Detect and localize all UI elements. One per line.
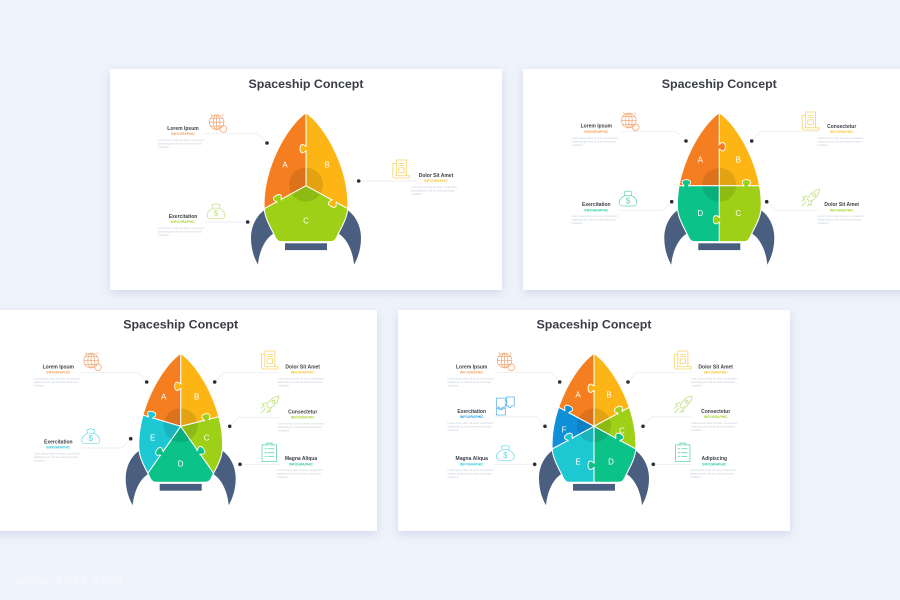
callout: Lorem Ipsum: [448, 353, 562, 387]
callout: Consectetur: Lorem ipsum dolor sit amet, consectetur: [278, 422, 324, 426]
callout: Lorem Ipsum: adipiscing elit, sed do eiusmod tempor: [158, 141, 202, 145]
callout: Dolor Sit Amet: [357, 160, 457, 196]
callout: Consectetur: Consectetur: [701, 409, 730, 415]
callout: Lorem Ipsum: incididunt: [448, 383, 459, 387]
callout: Exercitation: adipiscing elit, sed do eiusmod tempor: [448, 424, 492, 428]
callout: Dolor Sit Amet: Lorem ipsum dolor sit amet, consectetur: [818, 214, 864, 218]
callout: Consectetur: INFOGRAPHIC: [830, 130, 854, 134]
title: Spaceship Concept: [662, 77, 777, 91]
callout: Magna Aliqua: Magna Aliqua: [456, 456, 488, 462]
rocket: parts A B C D E F: F: [562, 425, 567, 434]
callout: Exercitation: Exercitation: [582, 202, 611, 208]
rocket: parts A B C D E: B: [194, 392, 199, 401]
panel: three-part rocket: [110, 69, 502, 290]
callout: Consectetur: incididunt: [818, 143, 829, 147]
rocket: parts A B C D E: D: [178, 459, 184, 468]
callout: Consectetur: adipiscing elit, sed do eiusmod tempor: [278, 425, 322, 429]
callout: Consectetur: adipiscing elit, sed do eiusmod tempor: [691, 424, 735, 428]
rocket: parts A B C: [246, 111, 366, 265]
callout: Exercitation: INFOGRAPHIC: [46, 446, 71, 450]
title: Spaceship Concept: [249, 77, 363, 91]
callout: Magna Aliqua: incididunt: [448, 475, 459, 479]
callout: Exercitation: incididunt: [158, 233, 169, 237]
callout: Adipiscing: incididunt: [690, 475, 701, 479]
callout: Lorem Ipsum: adipiscing elit, sed do eiusmod tempor: [34, 380, 78, 384]
callout: Dolor Sit Amet: incididunt: [278, 383, 289, 387]
callout: Lorem Ipsum: adipiscing elit, sed do eiusmod tempor: [448, 380, 492, 384]
rocket: parts A B C D: B: [736, 156, 741, 165]
callout: Consectetur: Lorem ipsum dolor sit amet, consectetur: [818, 136, 864, 140]
callout: Dolor Sit Amet: INFOGRAPHIC: [830, 208, 854, 212]
callout: Exercitation: [572, 191, 674, 225]
callout: Lorem Ipsum: [158, 114, 269, 149]
callout: Lorem Ipsum: Lorem ipsum dolor sit amet, consectetur: [572, 136, 618, 140]
callout: Lorem Ipsum: INFOGRAPHIC: [46, 371, 71, 375]
callout: Dolor Sit Amet: adipiscing elit, sed do eiusmod tempor: [691, 380, 735, 384]
callout: Dolor Sit Amet: incididunt: [411, 192, 422, 196]
callout: Consectetur: INFOGRAPHIC: [291, 416, 315, 420]
callout: Exercitation: INFOGRAPHIC: [171, 220, 195, 224]
callout: Magna Aliqua: [448, 445, 536, 479]
rocket: parts A B C D E F: E: [575, 457, 581, 466]
callout: Lorem Ipsum: adipiscing elit, sed do eiusmod tempor: [572, 139, 616, 143]
callout: Consectetur: Consectetur: [288, 410, 317, 416]
callout: Exercitation: Lorem ipsum dolor sit amet, consectetur: [158, 226, 204, 230]
rocket: parts A B C D: C: [735, 209, 741, 218]
callout: Lorem Ipsum: Lorem ipsum dolor sit amet, consectetur: [158, 138, 204, 142]
callout: Exercitation: adipiscing elit, sed do eiusmod tempor: [34, 455, 78, 459]
callout: Dolor Sit Amet: Dolor Sit Amet: [285, 364, 320, 370]
rocket: parts A B C D E: A: [161, 392, 167, 401]
callout: Lorem Ipsum: Lorem Ipsum: [456, 364, 488, 370]
callout: Exercitation: Exercitation: [44, 440, 73, 446]
callout: Exercitation: Lorem ipsum dolor sit amet, consectetur: [572, 214, 618, 218]
callout: Consectetur: Lorem ipsum dolor sit amet, consectetur: [691, 421, 737, 425]
callout: Magna Aliqua: Lorem ipsum dolor sit amet, consectetur: [277, 468, 323, 472]
callout: Exercitation: incididunt: [448, 428, 459, 432]
callout: Magna Aliqua: adipiscing elit, sed do eiusmod tempor: [277, 471, 321, 475]
callout: Magna Aliqua: [238, 443, 323, 479]
callout: Consectetur: INFOGRAPHIC: [704, 415, 728, 419]
callout: Lorem Ipsum: INFOGRAPHIC: [171, 132, 195, 136]
callout: Exercitation: INFOGRAPHIC: [460, 415, 484, 419]
callout: Exercitation: Lorem ipsum dolor sit amet, consectetur: [448, 421, 494, 425]
callout: Lorem Ipsum: incididunt: [572, 143, 583, 147]
callout: Lorem Ipsum: [572, 113, 688, 147]
callout: Lorem Ipsum: INFOGRAPHIC: [584, 130, 609, 134]
callout: Lorem Ipsum: Lorem ipsum dolor sit amet, consectetur: [448, 376, 494, 380]
rocket: parts A B C D: A: [698, 156, 704, 165]
callout: Exercitation: Exercitation: [169, 214, 197, 220]
callout: Adipiscing: [652, 443, 736, 479]
callout: Lorem Ipsum: Lorem ipsum dolor sit amet, consectetur: [34, 376, 80, 380]
callout: Magna Aliqua: incididunt: [277, 475, 288, 479]
rocket: parts A B C D: [659, 111, 779, 265]
callout: Dolor Sit Amet: INFOGRAPHIC: [291, 371, 315, 375]
callout: Dolor Sit Amet: Lorem ipsum dolor sit amet, consectetur: [411, 185, 457, 189]
callout: Consectetur: [228, 396, 324, 432]
callout: Exercitation: Lorem ipsum dolor sit amet, consectetur: [34, 452, 80, 456]
rocket: parts A B C D E F: D: [608, 457, 614, 466]
rocket: parts A B C D: D: [697, 209, 703, 218]
callout: Dolor Sit Amet: Lorem ipsum dolor sit amet, consectetur: [691, 376, 737, 380]
rocket: parts A B C: C: [303, 217, 309, 226]
callout: Magna Aliqua: Lorem ipsum dolor sit amet, consectetur: [448, 468, 494, 472]
callout: Adipiscing: Adipiscing: [702, 456, 727, 462]
callout: Consectetur: [750, 112, 864, 147]
callout: Dolor Sit Amet: incididunt: [818, 221, 829, 225]
callout: Dolor Sit Amet: adipiscing elit, sed do eiusmod tempor: [818, 217, 862, 221]
callout: Consectetur: Consectetur: [827, 124, 856, 130]
callout: Lorem Ipsum: incididunt: [34, 383, 45, 387]
callout: Lorem Ipsum: incididunt: [158, 145, 169, 149]
callout: Dolor Sit Amet: [213, 351, 324, 387]
rocket: parts A B C D E: [126, 354, 236, 506]
callout: Exercitation: [34, 429, 132, 462]
callout: Magna Aliqua: adipiscing elit, sed do eiusmod tempor: [448, 471, 492, 475]
callout: Dolor Sit Amet: Lorem ipsum dolor sit amet, consectetur: [278, 376, 324, 380]
callout: Dolor Sit Amet: incididunt: [691, 383, 702, 387]
callout: Exercitation: Exercitation: [457, 409, 486, 415]
callout: Exercitation: incididunt: [34, 458, 45, 462]
callout: Lorem Ipsum: Lorem Ipsum: [43, 364, 75, 370]
rocket: parts A B C D E F: [539, 354, 649, 506]
callout: Lorem Ipsum: INFOGRAPHIC: [460, 371, 484, 375]
callout: Magna Aliqua: INFOGRAPHIC: [289, 462, 313, 466]
callout: Lorem Ipsum: [34, 353, 148, 387]
callout: Consectetur: incididunt: [278, 428, 289, 432]
callout: Dolor Sit Amet: Dolor Sit Amet: [419, 173, 454, 179]
panel: six-part rocket: [398, 310, 790, 531]
callout: Dolor Sit Amet: [765, 189, 864, 225]
callout: Consectetur: incididunt: [691, 428, 702, 432]
callout: Magna Aliqua: Magna Aliqua: [285, 456, 317, 462]
callout: Exercitation: adipiscing elit, sed do eiusmod tempor: [158, 229, 202, 233]
title: Spaceship Concept: [537, 318, 651, 332]
callout: Dolor Sit Amet: Dolor Sit Amet: [698, 364, 733, 370]
callout: Dolor Sit Amet: adipiscing elit, sed do eiusmod tempor: [411, 188, 455, 192]
callout: Dolor Sit Amet: INFOGRAPHIC: [424, 179, 448, 183]
rocket: parts A B C D E F: C: [619, 426, 625, 435]
title: Spaceship Concept: [123, 318, 238, 332]
callout: Consectetur: adipiscing elit, sed do eiusmod tempor: [818, 139, 862, 143]
rocket: parts A B C D E F: A: [575, 390, 581, 399]
callout: Lorem Ipsum: Lorem Ipsum: [581, 124, 613, 130]
callout: Exercitation: INFOGRAPHIC: [584, 208, 609, 212]
callout: Magna Aliqua: INFOGRAPHIC: [460, 462, 484, 466]
rocket: parts A B C D E: E: [150, 433, 155, 442]
callout: Exercitation: adipiscing elit, sed do eiusmod tempor: [572, 217, 616, 221]
watermark: www.25xt.com: [14, 572, 124, 588]
callout: Dolor Sit Amet: [626, 351, 737, 387]
callout: Adipiscing: adipiscing elit, sed do eiusmod tempor: [690, 471, 734, 475]
callout: Dolor Sit Amet: Dolor Sit Amet: [824, 202, 859, 208]
callout: Lorem Ipsum: Lorem Ipsum: [167, 126, 199, 132]
callout: Adipiscing: Lorem ipsum dolor sit amet, consectetur: [690, 468, 736, 472]
rocket: parts A B C D E: C: [204, 433, 210, 442]
panel: five-part rocket: [0, 310, 377, 531]
callout: Exercitation: incididunt: [572, 221, 583, 225]
callout: Consectetur: [641, 396, 737, 432]
rocket: parts A B C: B: [324, 161, 330, 170]
callout: Exercitation: [158, 204, 250, 237]
callout: Dolor Sit Amet: adipiscing elit, sed do eiusmod tempor: [278, 380, 322, 384]
rocket: parts A B C: A: [282, 161, 288, 170]
callout: Adipiscing: INFOGRAPHIC: [702, 462, 727, 466]
callout: Dolor Sit Amet: INFOGRAPHIC: [704, 371, 728, 375]
callout: Exercitation: [448, 397, 547, 432]
panel: four-part rocket: [523, 69, 900, 290]
rocket: parts A B C D E F: B: [606, 390, 612, 399]
